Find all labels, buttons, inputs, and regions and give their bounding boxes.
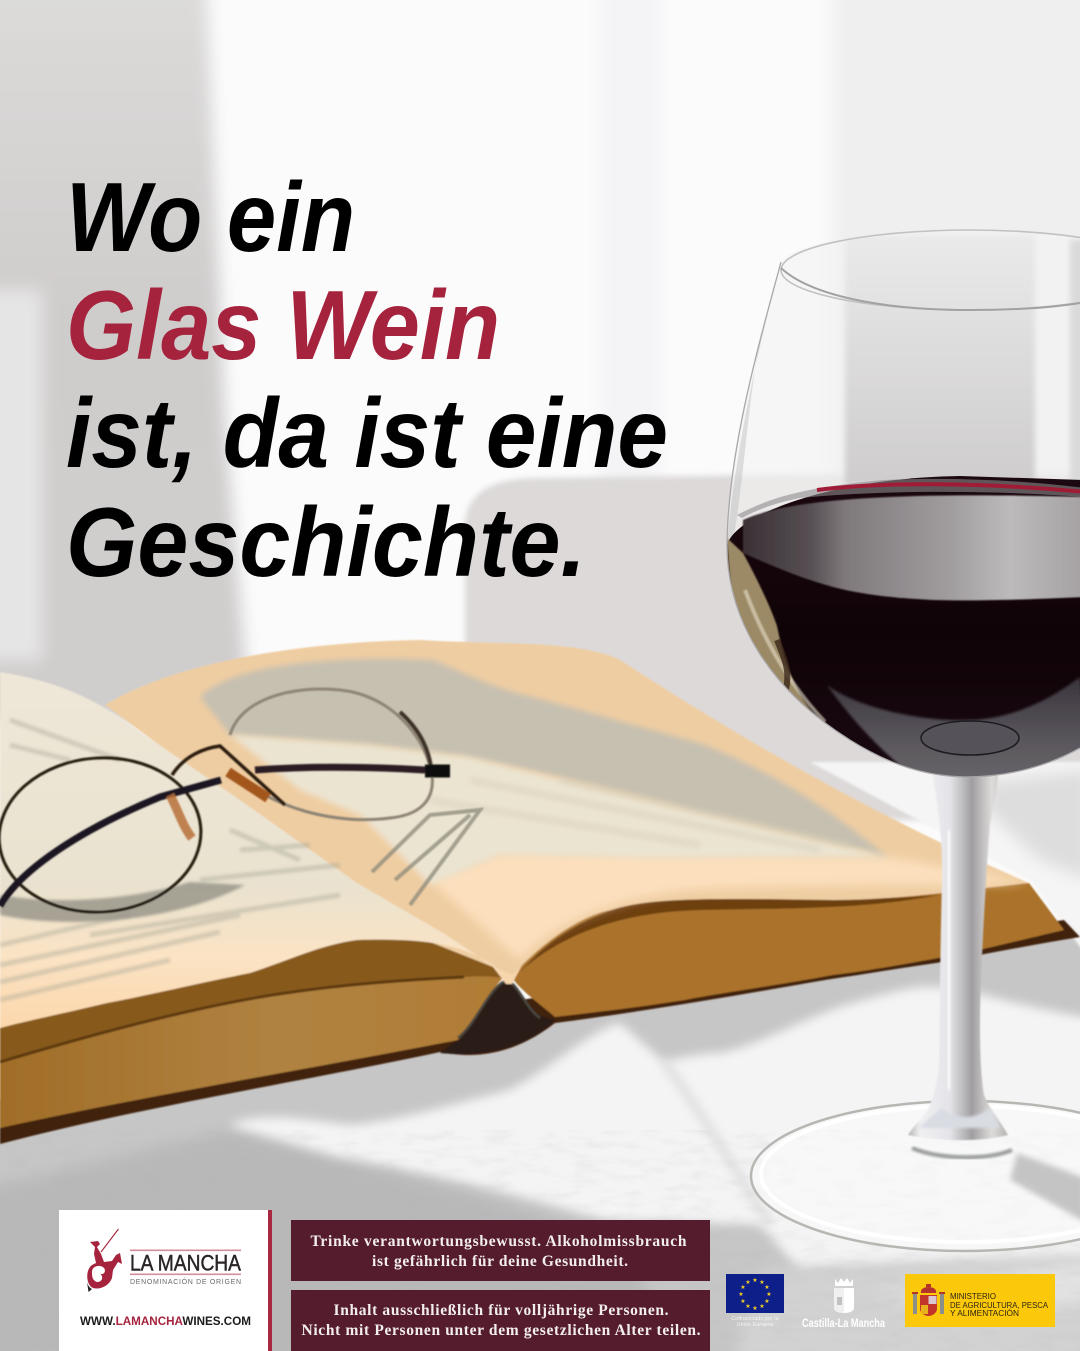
logo wordmark: LA MANCHA bbox=[130, 1250, 241, 1276]
logo: European Union: ★ bbox=[752, 1305, 758, 1312]
logo: European Union: ★ bbox=[740, 1298, 746, 1305]
left page bbox=[0, 672, 503, 1028]
glass bowl bbox=[720, 225, 1080, 790]
headline line 1: Wo ein bbox=[66, 162, 355, 272]
logo: Ministerio de Agricultura: DE AGRICULTURA, PESCA bbox=[950, 1301, 1049, 1310]
right page bbox=[105, 640, 1029, 975]
logo: Ministerio de Agricultura: MINISTERIO bbox=[950, 1292, 996, 1301]
logo: European Union: ★ bbox=[752, 1277, 758, 1284]
logo wordmark bbox=[130, 1250, 241, 1286]
open book bbox=[0, 640, 1080, 1144]
logo wordmark: DENOMINACIÓN DE ORIGEN bbox=[130, 1277, 241, 1286]
logo: European Union bbox=[726, 1274, 784, 1328]
logo: Ministerio de Agricultura: Y ALIMENTACIÓN bbox=[950, 1309, 1019, 1318]
logo: European Union: Cofinanciado por la bbox=[731, 1316, 780, 1322]
logo: European Union: ★ bbox=[738, 1291, 744, 1298]
icon: coat of arms bbox=[912, 1284, 945, 1316]
right page shadowed text bbox=[200, 659, 888, 857]
bridge bbox=[172, 746, 285, 805]
book spine gap bbox=[440, 981, 555, 1054]
website url: WWW.LAMANCHAWINES.COM bbox=[80, 1316, 251, 1328]
wine body bbox=[720, 476, 1080, 790]
reading glasses bbox=[0, 689, 480, 922]
logo: Ministerio de Agricultura bbox=[905, 1274, 1055, 1327]
logo: European Union: ★ bbox=[745, 1303, 751, 1310]
lens shadows bbox=[0, 882, 245, 922]
notice: responsible drinking bbox=[291, 1220, 710, 1281]
table cloth bbox=[0, 762, 1080, 1351]
right lens bbox=[230, 689, 432, 820]
right page block bbox=[510, 883, 1064, 1017]
logo: European Union: Unión Europea bbox=[737, 1322, 774, 1328]
glass foot bbox=[751, 1101, 1080, 1251]
logo: Castilla-La Mancha bbox=[802, 1278, 885, 1330]
left page block bbox=[0, 933, 503, 1128]
logo: European Union: ★ bbox=[764, 1284, 770, 1291]
left lens bbox=[0, 751, 206, 919]
logo: Castilla-La Mancha: Castilla-La Mancha bbox=[802, 1318, 885, 1330]
logo: European Union: ★ bbox=[745, 1279, 751, 1286]
wine glass bbox=[720, 225, 1080, 1251]
icon: knight on horseback bbox=[87, 1229, 122, 1292]
headline line 2: Glas Wein bbox=[66, 270, 500, 380]
sunlit cloth bbox=[228, 987, 1080, 1270]
book cover bbox=[0, 920, 1080, 1144]
notice: responsible drinking: ist gefährlich für deine Gesundheit. bbox=[372, 1253, 628, 1270]
page fold patch bbox=[480, 950, 530, 984]
logo: European Union: ★ bbox=[759, 1303, 765, 1310]
logo: European Union: ★ bbox=[759, 1279, 765, 1286]
notice: adults only: Nicht mit Personen unter dem gesetzlichen Alter teilen. bbox=[302, 1322, 701, 1339]
logo: European Union: ★ bbox=[764, 1298, 770, 1305]
notice: adults only bbox=[291, 1290, 710, 1351]
logo: European Union: ★ bbox=[766, 1291, 772, 1298]
headline line 4: Geschichte. bbox=[66, 487, 586, 597]
headline bbox=[66, 162, 668, 597]
logo: European Union: ★ bbox=[740, 1284, 746, 1291]
temples bbox=[255, 767, 425, 770]
glass rim bbox=[781, 230, 1080, 310]
notice: adults only: Inhalt ausschließlich für volljährige Personen. bbox=[334, 1302, 669, 1319]
logo panel bbox=[59, 1210, 272, 1351]
headline line 3: ist, da ist eine bbox=[66, 378, 668, 488]
notice: responsible drinking: Trinke verantwortungsbewusst. Alkoholmissbrauch bbox=[310, 1233, 687, 1250]
glass stem bbox=[908, 775, 1008, 1140]
